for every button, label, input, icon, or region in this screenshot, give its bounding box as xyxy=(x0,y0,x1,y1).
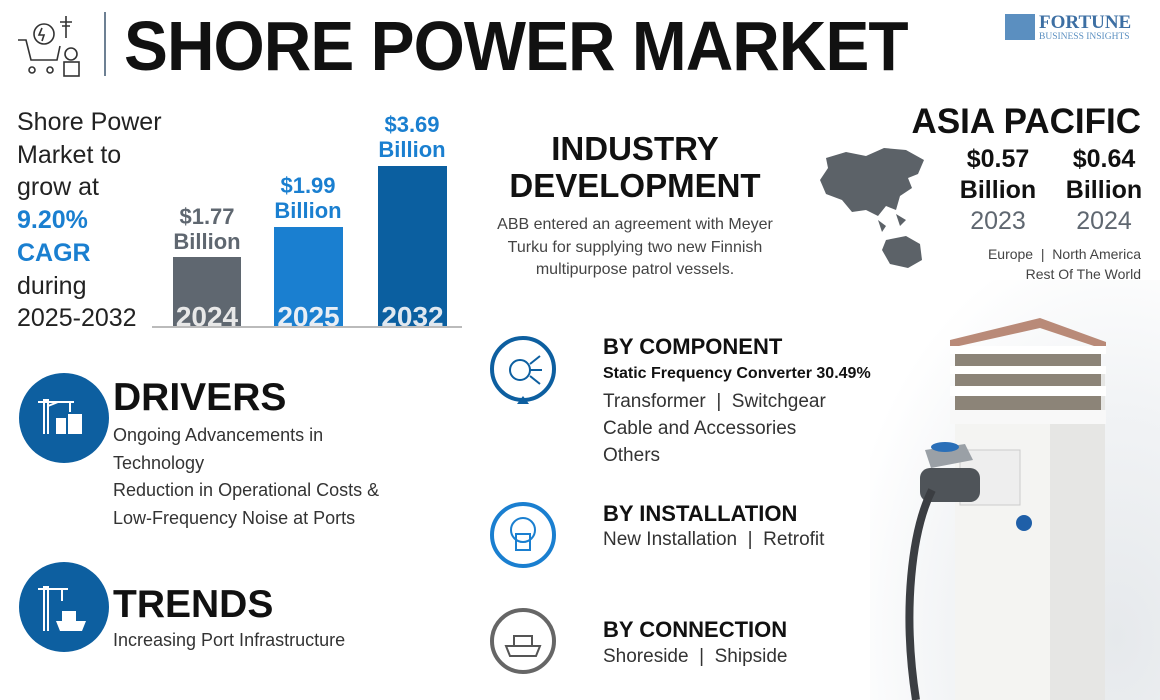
industry development: INDUSTRY xyxy=(551,130,719,167)
bar chart: Billion xyxy=(378,137,446,162)
title: SHORE POWER MARKET xyxy=(124,7,908,85)
text: Europe | North America xyxy=(988,246,1141,262)
bar chart: Billion xyxy=(173,229,241,254)
icon: component xyxy=(490,336,556,404)
bar chart: $1.99 xyxy=(280,173,336,198)
text: $0.57 xyxy=(967,145,1029,173)
panel: drivers: Technology xyxy=(113,452,204,472)
map icon xyxy=(820,148,924,268)
panel: drivers: Reduction in Operational Costs & xyxy=(113,480,379,500)
text: 2024 xyxy=(1076,207,1132,235)
CAGR text: 2025-2032 xyxy=(17,304,137,332)
panel: drivers: Low-Frequency Noise at Ports xyxy=(113,508,355,528)
photo: shore power post xyxy=(905,318,1106,700)
logo: FORTUNE xyxy=(1039,12,1131,33)
industry development: ABB entered an agreement with Meyer xyxy=(497,216,773,233)
panel: by installation xyxy=(490,501,824,568)
divider xyxy=(104,12,106,76)
industry development: multipurpose patrol vessels. xyxy=(536,261,734,278)
text: Billion xyxy=(1066,176,1142,204)
panel: by component: Transformer | Switchgear xyxy=(603,391,826,412)
industry development: Turku for supplying two new Finnish xyxy=(508,238,762,256)
icon: trends xyxy=(19,562,109,652)
icon: installation xyxy=(490,502,556,568)
panel: by component: Static Frequency Converter 30.49% xyxy=(603,365,871,382)
panel: trends: Increasing Port Infrastructure xyxy=(113,630,345,650)
panel: by installation: BY INSTALLATION xyxy=(603,501,797,526)
panel: by connection: BY CONNECTION xyxy=(603,617,787,642)
panel: by component: Others xyxy=(603,445,660,466)
panel: drivers xyxy=(19,373,379,528)
panel: by component xyxy=(490,334,871,466)
panel: trends: TRENDS xyxy=(113,583,273,626)
bar chart: $1.77 xyxy=(179,204,235,229)
text: 2023 xyxy=(970,207,1026,235)
logo xyxy=(1005,12,1131,42)
CAGR text: grow at xyxy=(17,173,99,201)
panel: by connection: Shoreside | Shipside xyxy=(603,646,788,667)
icon: drivers xyxy=(19,373,109,463)
background photo area xyxy=(870,280,1160,700)
CAGR text: 9.20% xyxy=(17,206,88,234)
panel: by component: BY COMPONENT xyxy=(603,334,782,359)
panel: by connection xyxy=(490,608,788,674)
industry development xyxy=(497,130,773,278)
panel: by installation: New Installation | Retrofit xyxy=(603,529,824,550)
panel: drivers: DRIVERS xyxy=(113,376,286,419)
panel: drivers: Ongoing Advancements in xyxy=(113,425,323,445)
bar chart: $3.69 xyxy=(384,112,440,137)
CAGR text: Shore Power xyxy=(17,108,162,136)
CAGR text: Market to xyxy=(17,141,121,169)
title icon xyxy=(18,16,80,77)
CAGR text: CAGR xyxy=(17,239,91,267)
panel: trends xyxy=(19,562,345,652)
icon: connection xyxy=(490,608,556,674)
CAGR text xyxy=(17,108,162,332)
logo: BUSINESS INSIGHTS xyxy=(1039,32,1130,42)
CAGR text: during xyxy=(17,272,86,300)
asia pacific: ASIA PACIFIC xyxy=(912,102,1141,141)
text: Rest Of The World xyxy=(1026,266,1141,282)
bar chart: Billion xyxy=(274,198,342,223)
text: Billion xyxy=(960,176,1036,204)
panel: by component: Cable and Accessories xyxy=(603,418,796,439)
bar chart xyxy=(152,112,462,328)
text: $0.64 xyxy=(1073,145,1135,173)
industry development: DEVELOPMENT xyxy=(509,167,761,204)
